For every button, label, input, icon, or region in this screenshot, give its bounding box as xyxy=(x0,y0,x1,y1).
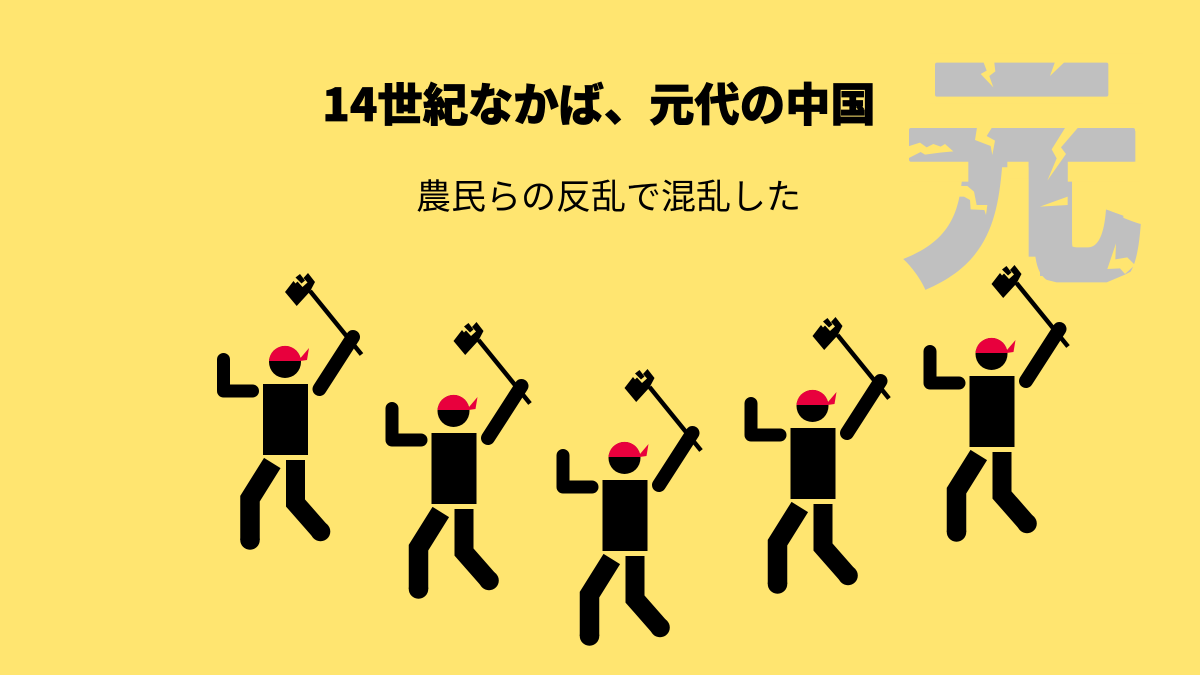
icon: peasant with axe 3 xyxy=(563,369,701,646)
icon: peasant with axe 2 xyxy=(392,322,530,599)
title: 14世紀なかば、元代の中国 xyxy=(322,69,876,135)
icon: peasant with axe 5 xyxy=(930,265,1068,542)
icon: peasant with axe 4 xyxy=(751,317,889,594)
subtitle: 農民らの反乱で混乱した xyxy=(416,169,801,220)
icon: peasant with axe 1 xyxy=(224,273,362,550)
